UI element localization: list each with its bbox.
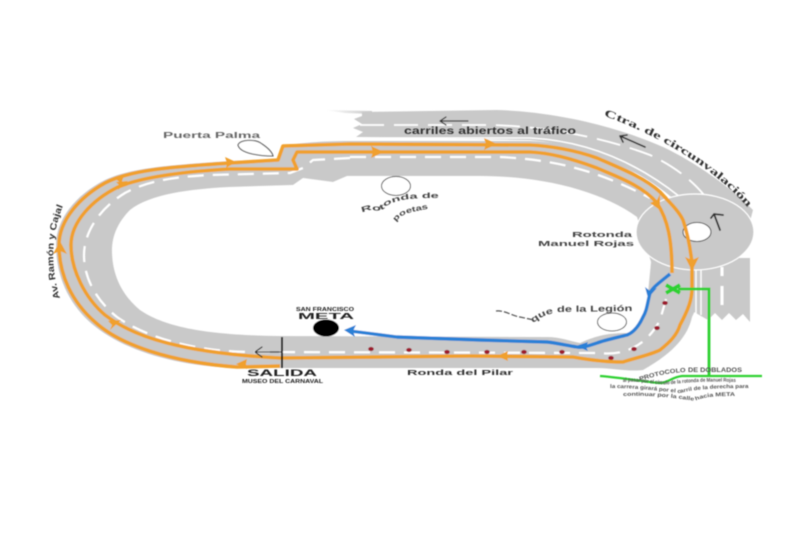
centre dashed line of main road xyxy=(84,158,667,353)
faded start of upper road xyxy=(325,110,372,114)
label: Salida: MUSEO DEL CARNAVAL xyxy=(242,379,324,385)
note line 3: continuar por la calle hacia META xyxy=(622,391,736,402)
label: rotonda Manuel Rojas: Rotonda xyxy=(572,230,634,239)
label: rotonda de poetas line 1: Rotonda de xyxy=(360,192,439,213)
label: Av. Ramon y Cajal: Av. Ramón y Cajal xyxy=(46,204,64,299)
squiggle leading to Legion label xyxy=(496,311,534,320)
green cross and detour line xyxy=(600,285,762,383)
black direction arrows xyxy=(255,117,723,357)
rotonda de poetas circle xyxy=(382,176,410,196)
label: San Francisco Meta: SAN FRANCISCO xyxy=(296,307,355,313)
label: parque de la Legion: que de la Legión xyxy=(531,304,632,323)
label: carretera de circunvalacion: Ctra. de circunvalación xyxy=(604,110,751,208)
main ring road xyxy=(56,141,700,371)
label: Puerta Palma: Puerta Palma xyxy=(163,131,261,140)
lower right road stub xyxy=(694,258,750,322)
stub lane lines xyxy=(696,267,722,315)
upper road: open traffic lanes xyxy=(353,110,753,240)
lane separator xyxy=(356,138,680,197)
red dots xyxy=(368,301,668,360)
orange direction arrows xyxy=(53,138,699,369)
label: Salida: SALIDA xyxy=(247,368,317,379)
label: San Francisco Meta: META xyxy=(298,311,354,321)
label: carriles abiertos: carriles abiertos al tráfico xyxy=(404,125,576,137)
note line 2: la carrera girará por el carril de la derecha para xyxy=(610,384,749,394)
label: rotonda de poetas line 2: poetas xyxy=(393,204,428,223)
note line 1: al pasar por el círculo de la rotonda de Manuel Rojas xyxy=(622,377,736,386)
label: rotonda Manuel Rojas: Manuel Rojas xyxy=(538,239,634,248)
finish and start markers xyxy=(282,320,339,368)
orange route xyxy=(59,144,692,367)
rotunda Manuel Rojas xyxy=(636,194,754,270)
labels xyxy=(46,110,751,402)
legion circle xyxy=(598,313,626,331)
blue route to finish xyxy=(344,274,670,351)
label: Ronda del Pilar: Ronda del Pilar xyxy=(407,368,513,377)
note heading: PROTOCOLO DE DOBLADOS xyxy=(638,366,742,382)
upper road dashed line xyxy=(360,125,704,195)
road network xyxy=(53,110,762,383)
interior of the ring xyxy=(112,176,651,343)
Puerta Palma teardrop xyxy=(238,140,273,156)
doubling protocol note xyxy=(610,366,749,402)
